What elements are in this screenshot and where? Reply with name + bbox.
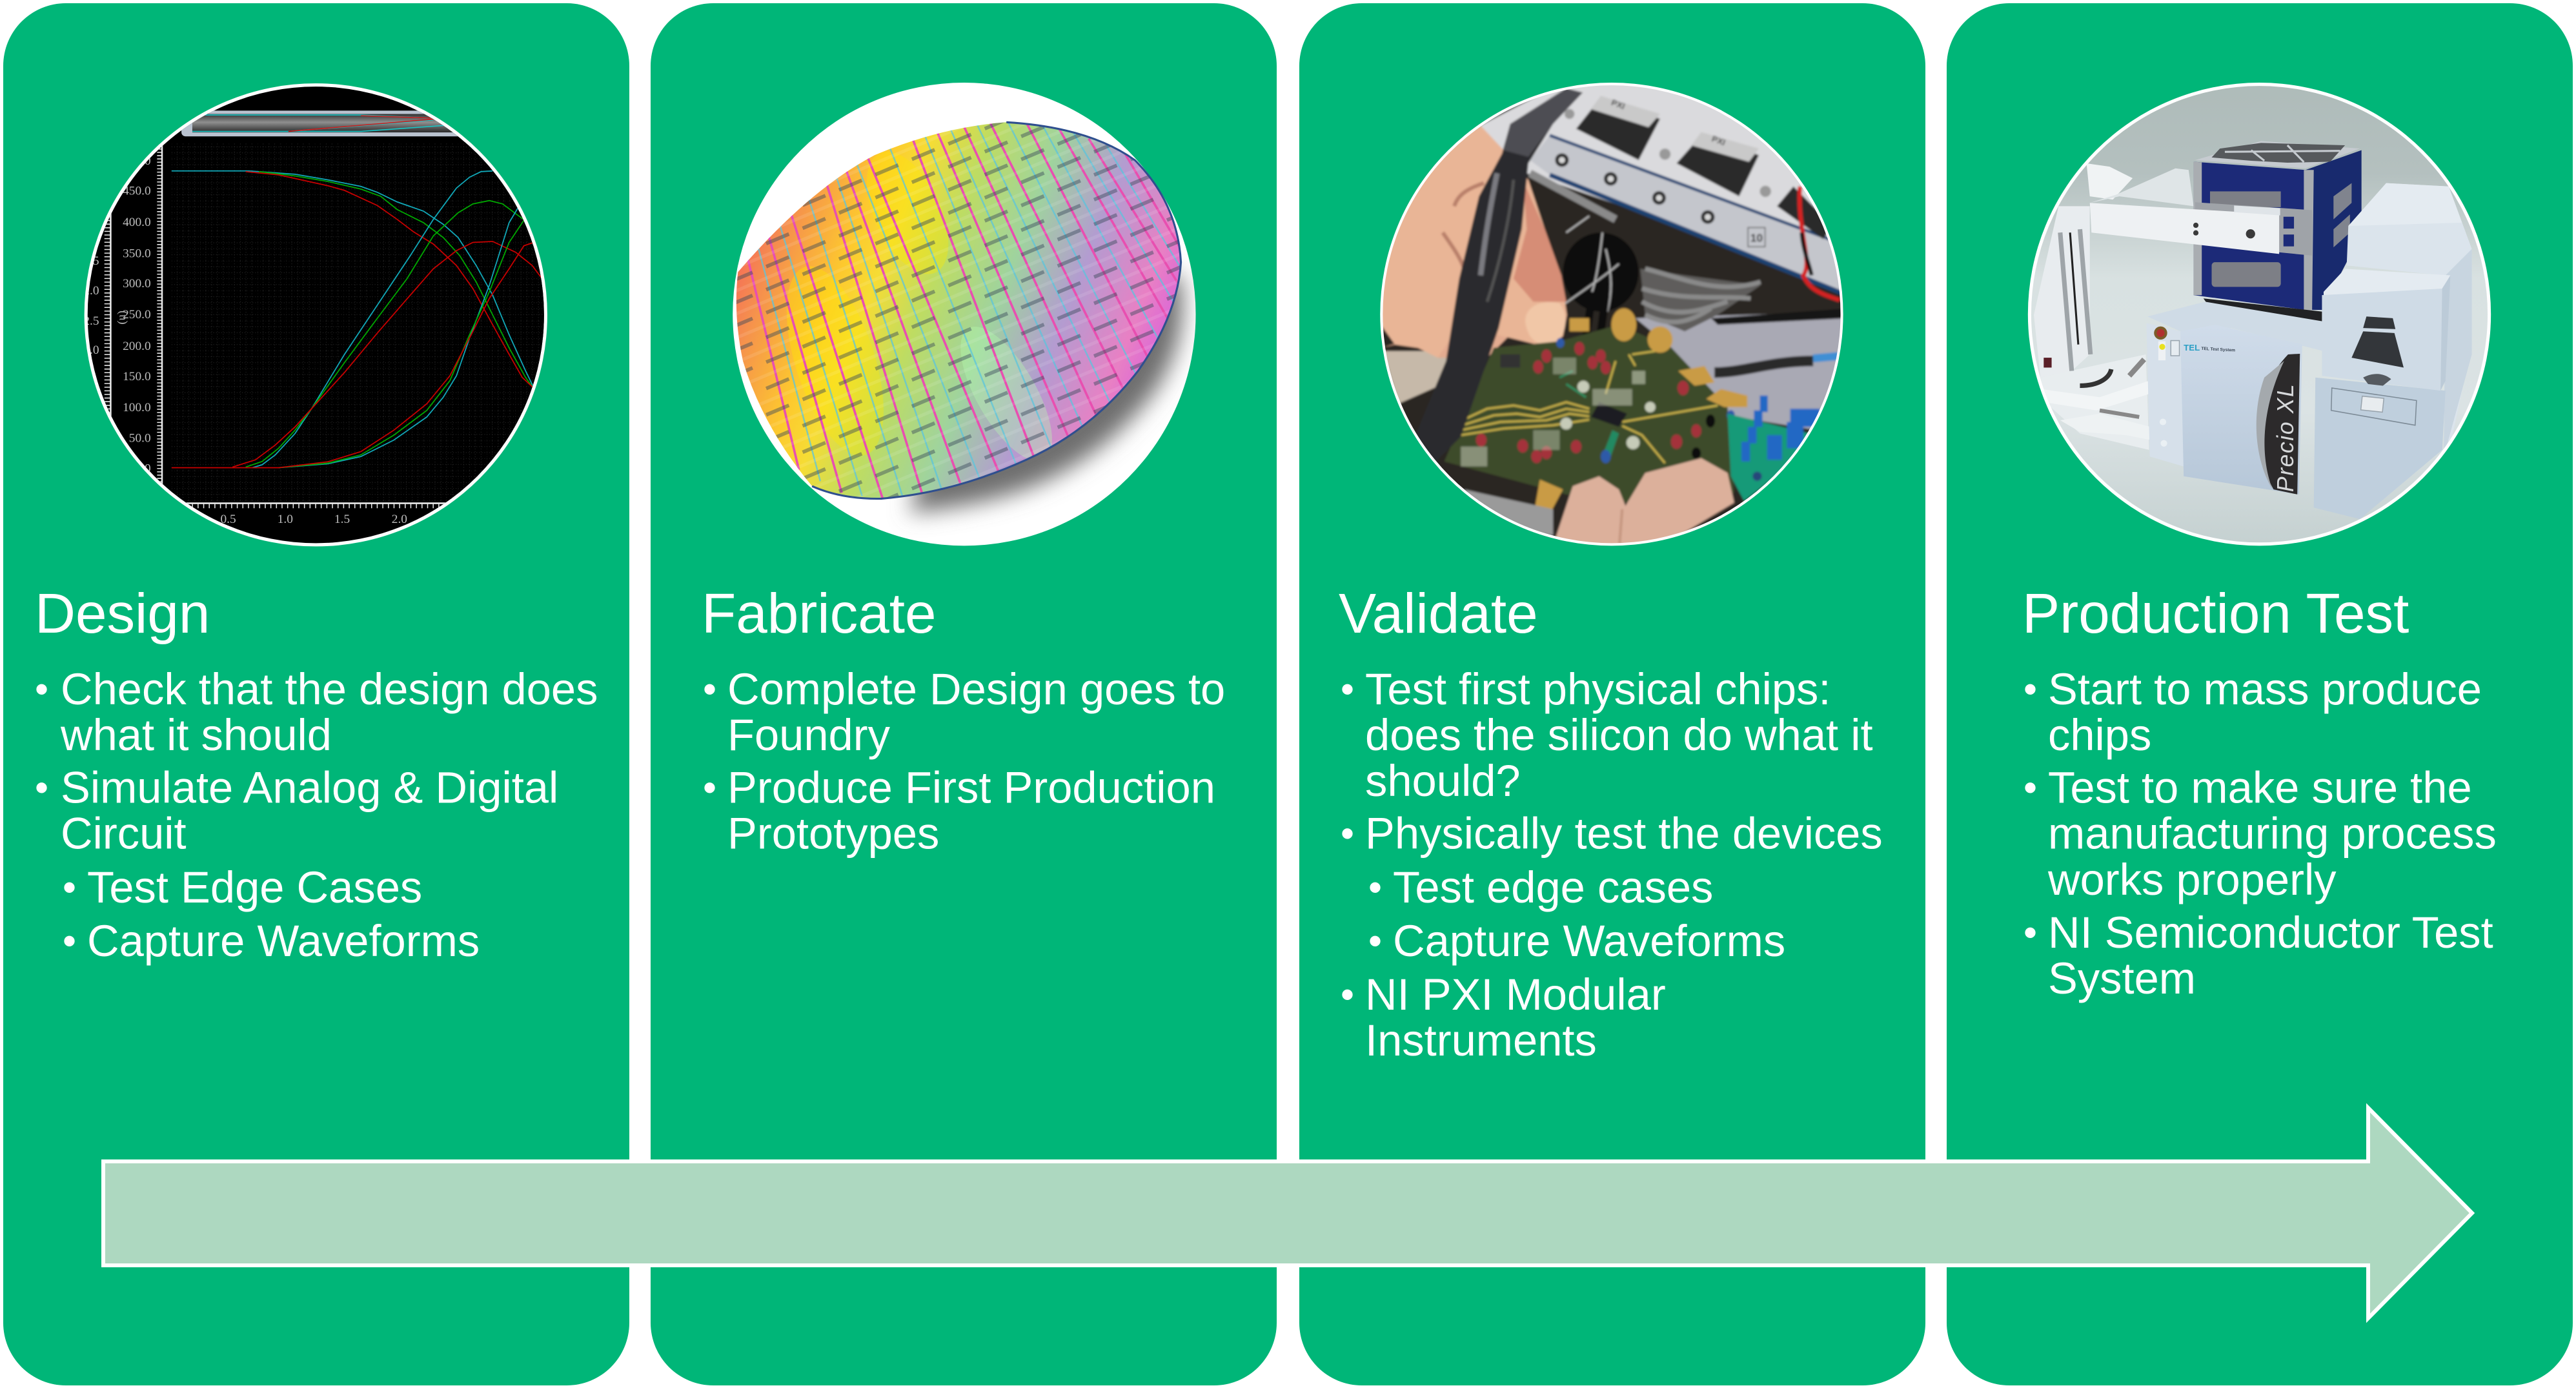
heading: Production Test: Production Test [2022, 582, 2409, 645]
bullet list: validate: Test edge cases [1393, 862, 1713, 912]
bullet list: design: what it should [60, 710, 332, 760]
bullet list: production test: Start to mass produce [2048, 664, 2482, 714]
bullet list: production test: chips [2048, 710, 2151, 760]
bullet list: design: • [63, 919, 76, 963]
bullet list: design [35, 664, 598, 966]
bullet list: validate: does the silicon do what it [1365, 710, 1873, 760]
bullet list: design: Check that the design does [61, 664, 598, 714]
bullet list: validate: • [1368, 919, 1382, 963]
photo: waveform simulation plot: 300.0 [123, 277, 151, 291]
fabricate card background [651, 3, 1277, 1385]
bullet list: production test: System [2048, 954, 2196, 1003]
photo: waveform simulation plot: 50.0 [129, 432, 151, 445]
bullet list: validate: • [1341, 668, 1354, 711]
bullet list: design: Test Edge Cases [87, 862, 422, 912]
photo: waveform simulation plot: 100.0 [123, 401, 151, 414]
photo: waveform simulation plot: 250.0 [123, 308, 151, 321]
photo: waveform simulation plot: 1.5 [334, 513, 350, 526]
bullet list: validate: NI PXI Modular [1365, 970, 1666, 1019]
photo: waveform simulation plot: 0.5 [220, 513, 236, 526]
photo: silicon wafer [733, 83, 1196, 546]
heading: Design: Design [35, 582, 210, 645]
photo: waveform simulation plot: .5 [90, 254, 99, 268]
bullet list: design: • [63, 866, 76, 909]
bullet list: production test: NI Semiconductor Test [2048, 908, 2493, 957]
photo: waveform simulation plot: 150.0 [123, 370, 151, 383]
photo: waveform simulation plot: 500 [132, 154, 151, 168]
bullet list: validate: should? [1365, 756, 1521, 806]
photo: waveform simulation plot: 350.0 [123, 247, 151, 260]
photo: waveform simulation plot: 200.0 [123, 340, 151, 353]
photo: waveform simulation plot: 450.0 [123, 185, 151, 198]
bullet list: production test: manufacturing process [2048, 808, 2497, 859]
photo: waveform simulation plot: (u) [115, 311, 128, 325]
bullet list: production test: • [2023, 911, 2037, 954]
bullet list: validate: Capture Waveforms [1393, 916, 1785, 966]
heading: Fabricate: Fabricate [702, 582, 936, 645]
bullet list: validate: • [1341, 973, 1354, 1016]
bullet list: validate: Physically test the devices [1365, 808, 1883, 859]
bullet list: validate: • [1341, 812, 1354, 855]
bullet list: design: Capture Waveforms [87, 916, 480, 966]
bullet list: design: • [35, 668, 48, 711]
photo: waveform simulation plot: 0 [145, 462, 151, 476]
photo: semiconductor test system: TEL [2184, 343, 2200, 352]
panel: fabricate [651, 0, 1277, 1385]
panel: validate [1299, 3, 1925, 1385]
photo: hands probing a circuit board: 10 [1750, 231, 1763, 244]
production test card background [1947, 3, 2573, 1385]
photo: hands probing a circuit board: PXI [1610, 97, 1627, 111]
validate card background [1299, 3, 1925, 1385]
photo: waveform simulation plot: .0 [90, 343, 99, 357]
bullet list: design: • [35, 766, 48, 810]
photo: waveform simulation plot: 2.0 [392, 513, 407, 526]
photo: semiconductor test system: Precio XL [2273, 383, 2298, 492]
bullet list: validate: • [1368, 866, 1382, 909]
bullet list: production test: • [2023, 766, 2037, 810]
photo: waveform simulation plot [81, 81, 552, 552]
bullet list: validate: Test first physical chips: [1365, 664, 1831, 714]
photo: hands probing a circuit board: PXI [1710, 134, 1727, 147]
bullet list: validate [1341, 664, 1883, 1065]
heading: Validate: Validate [1339, 582, 1538, 645]
arrow: lifecycle progress [103, 1108, 2472, 1318]
bullet list: production test: Test to make sure the [2048, 763, 2472, 812]
photo: waveform simulation plot: 2.0 [83, 284, 99, 298]
design card background [3, 3, 629, 1385]
photo: semiconductor test system [2021, 77, 2498, 555]
bullet list: production test [2023, 664, 2497, 1003]
bullet list: fabricate: Foundry [727, 710, 891, 760]
photo: hands probing a circuit board [1375, 77, 1856, 552]
photo: semiconductor test system: TEL Test System [2201, 347, 2235, 353]
bullet list: fabricate: Produce First Production [727, 763, 1215, 812]
photo: waveform simulation plot: 2.5 [83, 314, 99, 328]
bullet list: production test: • [2023, 668, 2037, 711]
bullet list: fabricate: • [703, 668, 716, 711]
bullet list: fabricate: • [703, 766, 716, 810]
bullet list: production test: works properly [2047, 855, 2337, 904]
photo: waveform simulation plot: 1.0 [278, 513, 293, 526]
bullet list: fabricate: Prototypes [727, 808, 939, 859]
panel: design [3, 3, 629, 1385]
bullet list: design: Circuit [61, 808, 187, 859]
panel: production test [1947, 3, 2573, 1385]
bullet list: validate: Instruments [1365, 1015, 1597, 1065]
bullet list: fabricate [703, 664, 1225, 859]
photo: waveform simulation plot: 400.0 [123, 216, 151, 229]
bullet list: fabricate: Complete Design goes to [727, 664, 1225, 714]
bullet list: design: Simulate Analog & Digital [61, 763, 558, 812]
